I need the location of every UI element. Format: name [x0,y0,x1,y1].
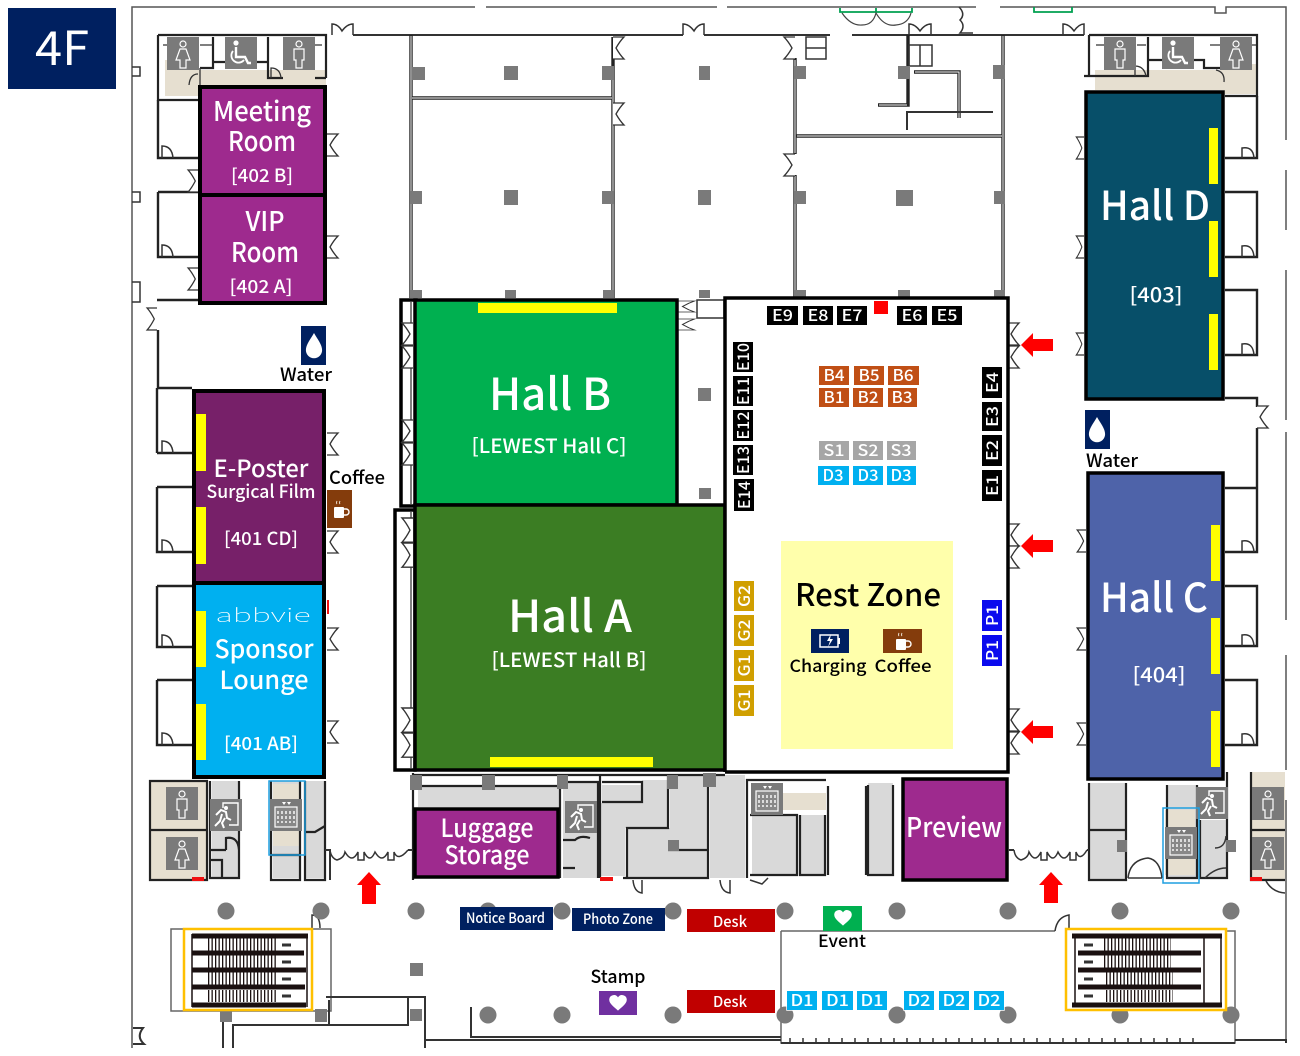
panel: Hall B [415,300,677,505]
lobby walls [150,781,325,880]
booths: E10 to E14 [730,342,755,511]
booths: D1 and D2: D1 [790,987,814,1011]
booths: B1 to B6: B6 [892,362,914,386]
arrow: entrance middle [1021,534,1053,558]
booths: D3 [818,462,916,486]
panel: Hall C [1088,473,1223,779]
booths: E10 to E14: E11 [730,377,754,405]
booths: D1 and D2: D2 [942,987,966,1011]
booths: E1 to E4: E1 [979,475,1003,496]
panel: E-Poster Surgical Film: Surgical Film [206,478,316,504]
booths: G1 and G2: G1 [731,689,755,712]
lower hall [171,929,1235,1043]
icon: Stamp heart: Stamp [590,963,646,989]
green marker east [1034,7,1072,12]
booths: E1 to E4: E3 [979,406,1003,427]
back-of-house grey rooms [150,60,1285,880]
booths: G1 and G2 [731,581,755,716]
restroom icons: north west [167,37,315,70]
panel: E-Poster Surgical Film: E-Poster [214,449,309,484]
arrow: lobby west [357,872,381,904]
panel: Hall C: Hall C [1100,566,1208,624]
panel: VIP Room [200,195,325,303]
panel: Luggage Storage: Luggage [440,809,534,845]
panel: Rest Zone: Coffee [874,652,932,677]
booths: B1 to B6: B4 [824,362,844,386]
icon: water drop west: Water [280,361,333,387]
booths: D3: D3 [890,462,912,486]
icon: charging [811,629,849,653]
icon: Event heart [818,906,866,952]
icon: coffee west [327,464,385,528]
panel: E-Poster Surgical Film [194,391,324,583]
booths: B1 to B6: B2 [858,384,878,408]
icon: coffee west: Coffee [329,464,385,490]
panel: Hall D: [403] [1130,279,1182,308]
panel: AbbVie Sponsor Lounge: Sponsor [214,630,314,666]
panel: Rest Zone: Charging [790,652,867,677]
booths: G1 and G2: G2 [731,619,755,642]
arrow: entrance lower [1021,720,1053,744]
panel: VIP Room: VIP [245,200,284,239]
floor badge: 4F [8,8,116,89]
door strip beside Hall A [395,510,415,770]
sign: Desk lower [687,990,775,1013]
booths: P1 [979,600,1003,666]
booths: E5 to E9: E6 [902,302,922,326]
panel: Meeting Room: Room [228,120,296,159]
booths: D1 and D2 [787,987,1004,1011]
red fire markers [192,600,1262,881]
panel: E-Poster Surgical Film: [401 CD] [224,525,298,551]
booths: E5 to E9: E8 [808,302,828,326]
booths: D1 and D2: D1 [860,987,884,1011]
panel: Hall B: [LEWEST Hall C] [472,430,626,459]
booths: S1 to S3: S3 [890,437,912,461]
booths: E10 to E14: E14 [731,481,755,509]
booths: B1 to B6: B1 [824,384,844,408]
booths: P1: P1 [979,605,1003,626]
panel: Hall D [1086,92,1223,399]
booths: D1 and D2: D2 [978,987,1000,1011]
floor badge: 4F: 4F [35,10,89,79]
booths: E10 to E14: E13 [730,446,754,474]
panel: AbbVie Sponsor Lounge: [401 AB] [224,730,298,756]
booths: D3: D3 [858,462,878,486]
booths: B1 to B6 [819,362,919,408]
panel: Luggage Storage: Storage [444,836,530,872]
icon: water drop east [1085,410,1139,473]
panel: Hall A: Hall A [508,581,633,645]
panel: Luggage Storage [415,809,558,877]
rooms to the right [1225,96,1257,745]
booths: B1 to B6: B3 [892,384,912,408]
upper meeting hall partitions [411,35,1003,298]
panel: Meeting Room [200,87,325,195]
green entrance doors [842,13,911,25]
icon: Stamp heart [590,963,646,1015]
door strip beside Hall B [401,300,416,506]
arrow: entrance top [1021,333,1053,357]
panel: Hall C: [404] [1132,659,1186,688]
green entrance marker [840,8,912,12]
booths: E5 to E9: E7 [842,302,862,326]
panel: VIP Room: [402 A] [230,273,292,299]
exit and elevator icons [210,781,1228,883]
booths: E1 to E4 [979,367,1003,501]
red marker [874,301,888,314]
sign: Desk upper: Desk [713,911,747,932]
sign: Desk upper [687,909,775,932]
panel: Hall D: Hall D [1100,174,1210,232]
panel: exhibition room [725,298,1008,772]
booths: E5 to E9 [767,302,962,326]
booths: S1 to S3: S2 [858,437,878,461]
booths: D1 and D2: D1 [826,987,849,1011]
panel: Hall A: [LEWEST Hall B] [492,644,646,673]
panel: Rest Zone [781,541,953,749]
sign: Notice Board: Notice Board [466,908,545,928]
booths: E1 to E4: E4 [979,372,1003,393]
booths: S1 to S3: S1 [824,437,844,461]
panel: Preview [903,779,1007,880]
booths: E1 to E4: E2 [979,440,1003,461]
entrance revolving doors [330,850,1087,860]
panel: Rest Zone: Rest Zone [795,570,941,615]
booths: E5 to E9: E9 [772,302,793,326]
panel: Hall B: Hall B [489,359,611,423]
doors beside Hall B east [678,301,694,330]
booths: E10 to E14: E10 [730,343,754,371]
panel: AbbVie Sponsor Lounge: abbvie [216,601,310,628]
booths: P1: P1 [979,640,1003,661]
panel: AbbVie Sponsor Lounge [194,583,324,777]
icon: coffee [883,629,922,653]
restroom icons: south east [1252,787,1284,870]
restroom icons: north east [1104,37,1252,70]
icon: Event heart: Event [818,927,866,952]
panel: Meeting Room: Meeting [213,90,311,129]
panel: Preview: Preview [906,806,1002,845]
booths: B1 to B6: B5 [858,362,880,386]
icon: water drop east: Water [1086,447,1139,473]
escalators west [184,929,312,1010]
sign: Photo Zone: Photo Zone [583,909,653,929]
panel: Hall A [415,505,725,770]
panel: Meeting Room: [402 B] [231,162,293,188]
booths: E10 to E14: E12 [730,412,754,440]
booths: S1 to S3 [819,437,916,461]
panel: AbbVie Sponsor Lounge: Lounge [220,661,308,697]
booths: D3: D3 [822,462,844,486]
restroom icons: south west [166,787,198,870]
icon: water drop west [280,326,333,387]
sign: Desk lower: Desk [713,991,747,1012]
booths: D1 and D2: D2 [908,987,930,1011]
structural columns [218,65,1240,1024]
panel: VIP Room: Room [231,231,299,270]
booths: G1 and G2: G2 [731,585,755,607]
rooms to the left [157,100,198,745]
arrow: lobby east [1039,872,1063,903]
restroom blocks [158,35,1257,100]
booths: E5 to E9: E5 [936,302,958,326]
booths: G1 and G2: G1 [731,654,755,677]
escalators east [1066,929,1226,1010]
doors [147,37,1268,754]
